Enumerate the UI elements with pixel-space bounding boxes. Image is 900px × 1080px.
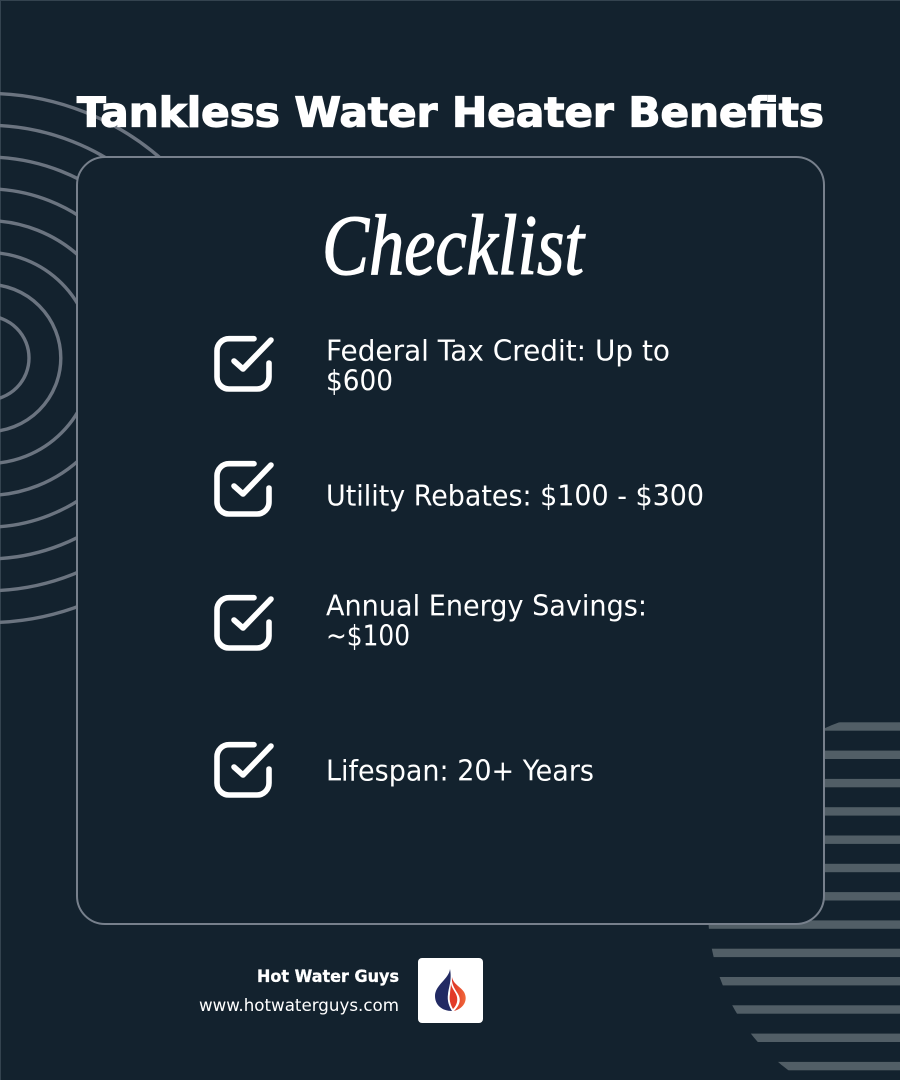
background: concentric arcs bbox=[0, 93, 252, 623]
text: lifespan: Lifespan: 20+ Years bbox=[326, 754, 594, 788]
checklist item: federal tax credit bbox=[217, 334, 670, 398]
logo bbox=[418, 958, 483, 1023]
checklist item: utility rebates bbox=[217, 464, 704, 514]
icon: flame inner red bbox=[450, 983, 457, 1009]
icon: flame red bbox=[452, 977, 466, 1011]
footer brand name: Hot Water Guys bbox=[257, 967, 399, 986]
title: Tankless Water Heater Benefits bbox=[77, 88, 824, 136]
icon: checkbox bbox=[217, 745, 271, 795]
text: annual energy savings: Annual Energy Savings: bbox=[326, 590, 647, 622]
text: annual energy savings amount: ~$100 bbox=[326, 620, 410, 652]
panel: checklist card bbox=[77, 157, 824, 924]
icon: checkbox bbox=[217, 339, 271, 389]
background: striped circle bbox=[700, 722, 900, 1070]
text: federal tax credit: Federal Tax Credit: Up to bbox=[326, 334, 670, 368]
text: utility rebates: Utility Rebates: $100 - $300 bbox=[326, 480, 704, 512]
icon: checkbox bbox=[217, 464, 271, 514]
checklist heading: Checklist bbox=[322, 197, 586, 293]
footer website: www.hotwaterguys.com bbox=[199, 996, 399, 1015]
icon: flame navy bbox=[435, 969, 452, 1011]
text: federal tax credit amount: $600 bbox=[326, 364, 393, 398]
checklist item: annual energy savings bbox=[217, 590, 647, 652]
icon: checkbox bbox=[217, 598, 271, 648]
checklist item: lifespan bbox=[217, 745, 594, 795]
